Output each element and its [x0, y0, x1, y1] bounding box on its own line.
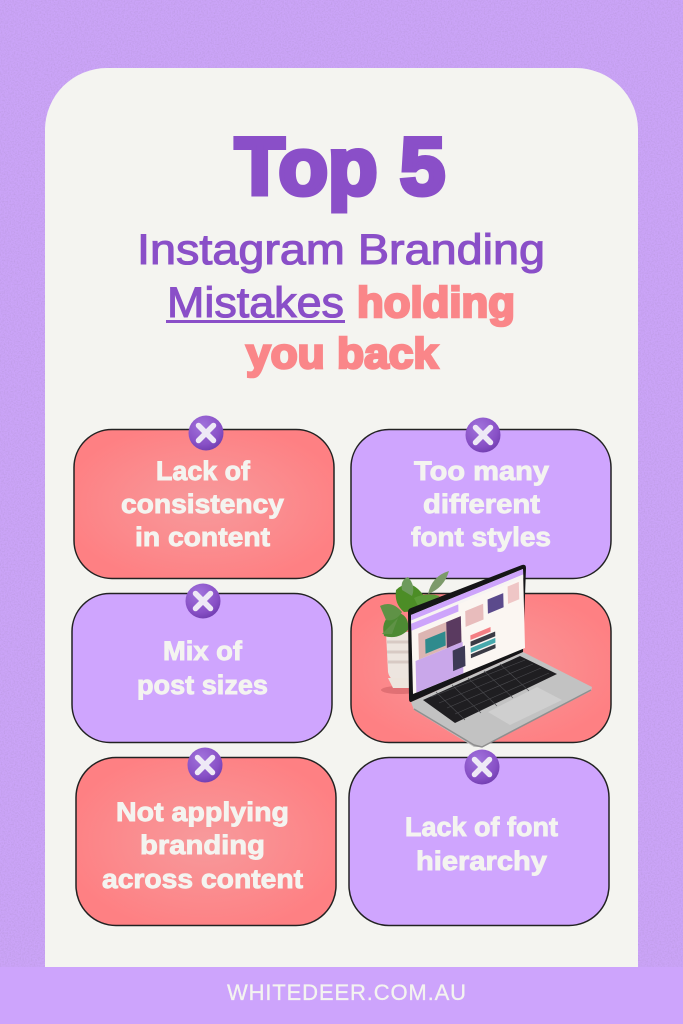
panel: mix of post sizes: post sizes	[137, 670, 268, 700]
screen content	[411, 569, 525, 694]
panel: mix of post sizes: Mix of	[163, 636, 243, 666]
trackpad	[488, 687, 562, 725]
icon: x badge 5	[464, 750, 500, 784]
panel: not applying branding: Not applying	[116, 797, 289, 827]
laptop base	[411, 652, 592, 747]
panel: not applying branding: branding	[140, 830, 265, 860]
panel: mix of post sizes	[72, 594, 332, 742]
icon: laptop	[408, 565, 592, 747]
screen frame	[408, 565, 526, 702]
panel: lack of font hierarchy	[349, 758, 609, 926]
panel: lack of consistency	[74, 430, 334, 578]
panel: lack of font hierarchy: Lack of font	[405, 812, 558, 842]
panel: too many font styles: font styles	[411, 522, 551, 552]
icon: x badge 1	[188, 416, 224, 450]
heading: Instagram Branding: Instagram Branding	[137, 226, 545, 274]
panel: lack of consistency: in content	[135, 522, 270, 552]
panel: main card	[45, 68, 638, 967]
panel: too many font styles: Too many	[414, 456, 549, 486]
title: Top 5: Top 5	[235, 122, 445, 212]
heading: you back: you back	[246, 330, 438, 378]
heading: Mistakes underlined: Mistakes	[167, 279, 344, 327]
panel: not applying branding	[76, 758, 336, 926]
panel: too many font styles	[351, 430, 611, 578]
icon: potted plant	[380, 571, 449, 694]
icon: x badge 3	[186, 584, 220, 618]
panel: lack of consistency: consistency	[121, 489, 284, 519]
keyboard	[423, 656, 557, 723]
footer band	[0, 967, 683, 1024]
panel: not applying branding: across content	[102, 864, 303, 894]
icon: x badge 2	[466, 418, 500, 452]
heading: holding: holding	[357, 279, 515, 327]
icon: x badge 4	[188, 748, 222, 782]
panel: too many font styles: different	[423, 489, 540, 519]
camera notch	[463, 586, 474, 592]
footer url: WHITEDEER.COM.AU	[227, 980, 466, 1005]
panel: red laptop card	[351, 594, 611, 742]
panel: lack of font hierarchy: hierarchy	[416, 846, 547, 876]
panel: lack of consistency: Lack of	[156, 456, 251, 486]
